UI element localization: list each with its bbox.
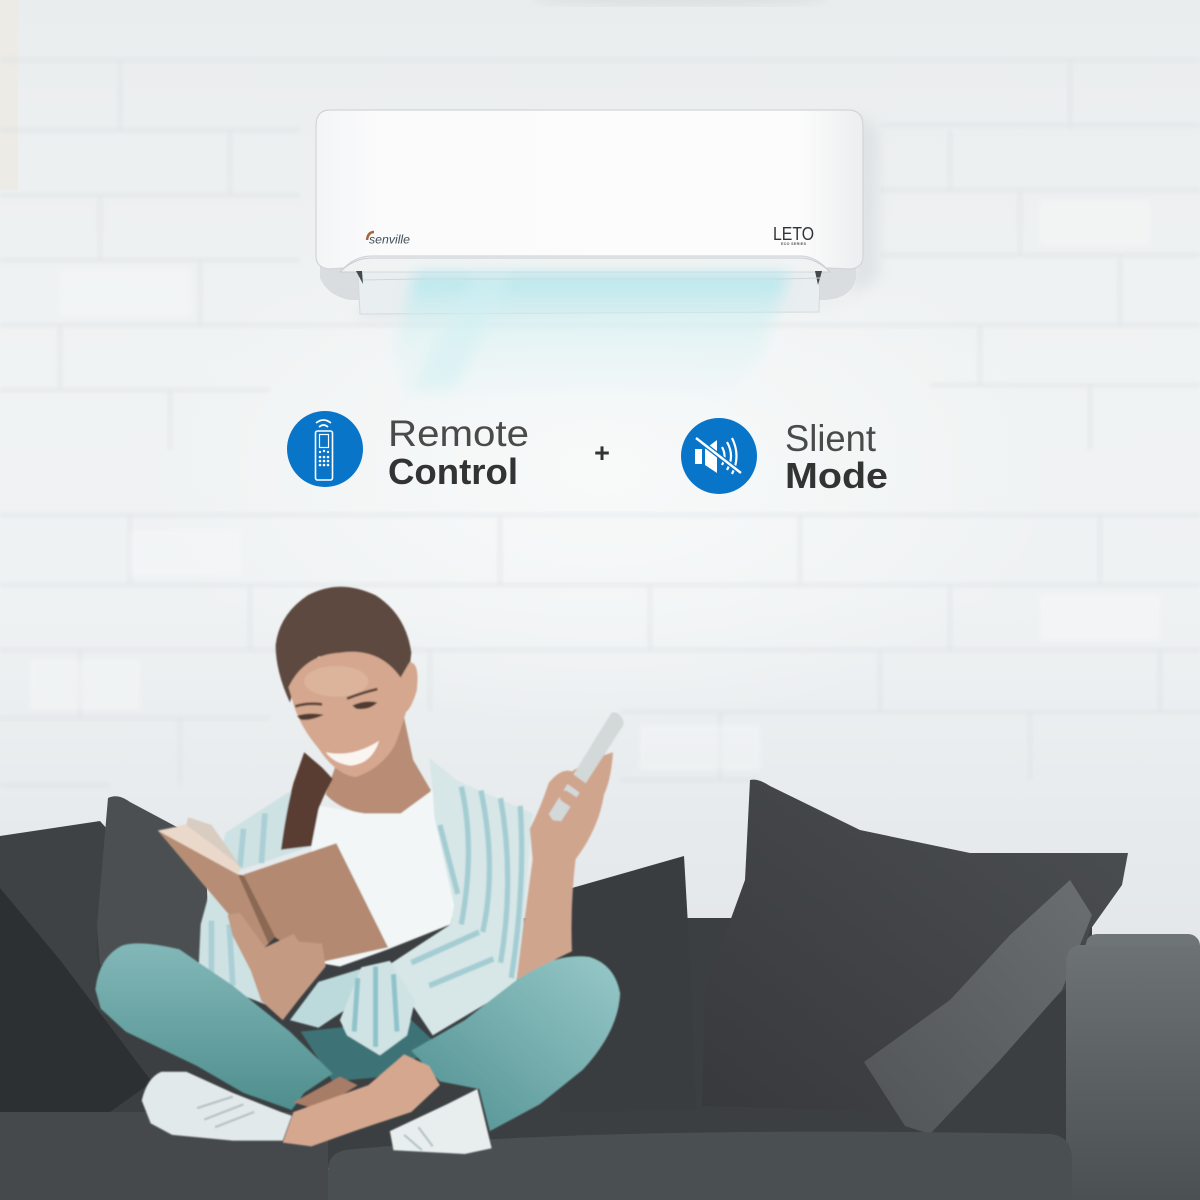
bare ankle back	[293, 1077, 358, 1110]
feature: remote control	[287, 411, 529, 492]
left shoe	[142, 1072, 292, 1141]
shirt left stripes	[211, 813, 265, 986]
pillow: small right	[864, 880, 1092, 1134]
white t-shirt	[311, 789, 454, 967]
pillow: large right	[702, 780, 1128, 1112]
seat cushion left	[0, 1112, 328, 1200]
LETO logo: LETO	[773, 223, 814, 244]
icon: remote control	[287, 411, 363, 487]
shoe laces	[197, 1097, 433, 1150]
hair	[276, 587, 411, 702]
sofa back	[0, 918, 1092, 1168]
LETO logo: ECO SERIES	[781, 242, 807, 246]
louver seam	[363, 278, 820, 280]
face	[288, 652, 418, 777]
front panel	[316, 110, 863, 269]
pillow: center	[560, 856, 696, 1112]
neck and chest	[326, 718, 431, 815]
striped shirt left	[199, 792, 318, 1009]
woman reading with remote	[95, 587, 624, 1154]
fingers over remote	[565, 779, 597, 815]
icon: muted speaker	[681, 418, 757, 494]
label: remote control	[388, 413, 529, 492]
lower housing	[320, 265, 856, 300]
label: remote control: Remote	[388, 413, 529, 454]
shirt right stripes	[411, 787, 522, 986]
pillow: far left	[0, 821, 108, 1020]
label: silent mode: Mode	[785, 455, 888, 496]
pillow: grey left	[97, 796, 210, 965]
feature: silent mode	[681, 418, 888, 496]
label: silent mode	[785, 418, 888, 496]
knot of shirt	[290, 961, 415, 1055]
raised arm	[517, 752, 613, 980]
bare shin	[283, 1055, 440, 1146]
lower lip	[340, 258, 830, 272]
seat cushion right	[328, 1132, 1072, 1200]
outlet dark slot	[356, 271, 822, 285]
remote in hand	[549, 712, 624, 821]
plus sign: +	[594, 438, 610, 468]
senville logo: senville	[369, 234, 410, 246]
braid	[281, 752, 333, 850]
pillow: dark lower left	[0, 888, 152, 1116]
sofa	[0, 780, 1200, 1200]
sofa arm	[1066, 945, 1200, 1200]
label: remote control: Control	[388, 451, 518, 492]
central seat of trousers	[301, 1020, 440, 1081]
air louver	[358, 272, 820, 314]
wall shadow of unit	[352, 112, 878, 318]
open book	[158, 817, 388, 963]
label: silent mode: Slient	[785, 418, 877, 459]
left leg	[95, 943, 333, 1110]
hand holding book	[227, 913, 326, 1020]
air conditioner unit	[316, 110, 878, 430]
cold air stream	[395, 273, 790, 430]
striped shirt right	[386, 758, 533, 1035]
right leg	[411, 956, 620, 1131]
right shoe	[390, 1089, 492, 1154]
facial features	[295, 666, 379, 766]
